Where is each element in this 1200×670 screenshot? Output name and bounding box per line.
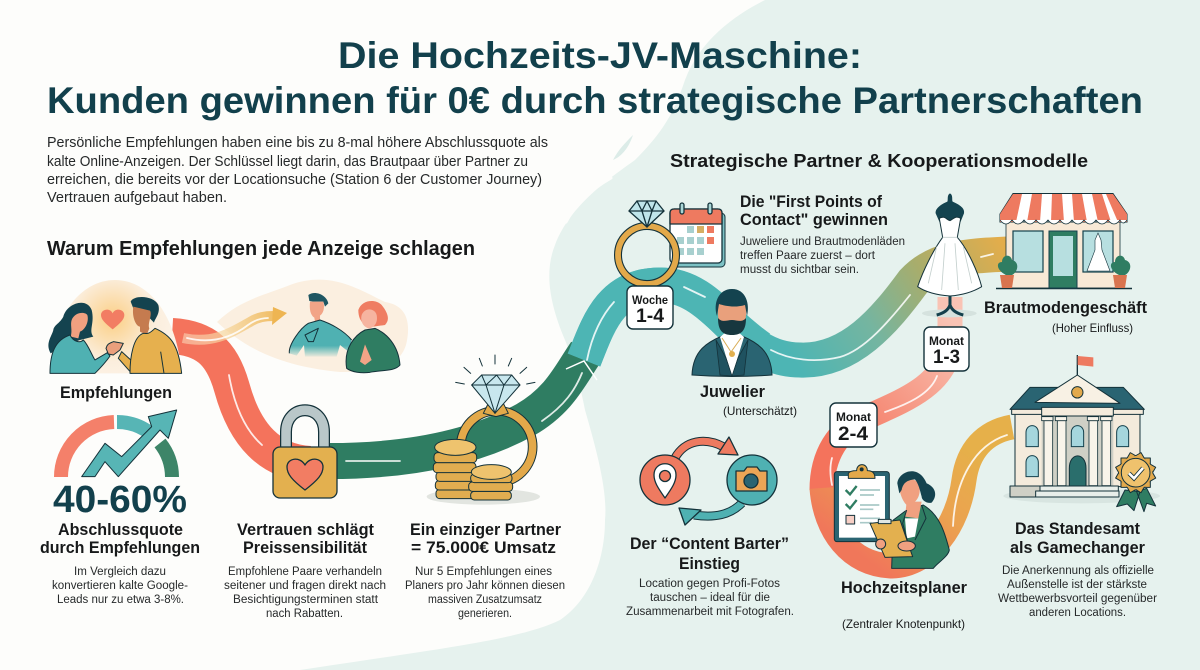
block: First Points of Contact: treffen Paare zuerst – dort bbox=[740, 250, 876, 262]
badge: Woche 1-4 bbox=[627, 286, 673, 329]
block: Standesamt: Die Anerkennung als offizielle bbox=[1002, 565, 1154, 577]
bust bbox=[936, 193, 964, 222]
eaves bbox=[1012, 409, 1143, 414]
left plant bbox=[998, 256, 1017, 275]
block: Ein einziger Partner bbox=[405, 520, 565, 620]
block: Ein einziger Partner: Planers pro Jahr können diesen bbox=[405, 580, 565, 592]
intro text: Persönliche Empfehlungen haben eine bis zu 8-mal höhere Abschlussquote als bbox=[47, 135, 548, 151]
block: Standesamt: anderen Locations. bbox=[1029, 607, 1126, 619]
label: Juwelier bbox=[700, 382, 797, 418]
woman body bbox=[346, 328, 400, 373]
head bbox=[900, 479, 920, 505]
door bbox=[1069, 456, 1086, 486]
title bbox=[47, 35, 1143, 121]
gauge arc: teal bbox=[117, 422, 150, 433]
woman face bbox=[71, 313, 88, 338]
checklist bbox=[846, 486, 857, 508]
badge: Monat 2-4: 2-4 bbox=[838, 424, 868, 445]
ring bbox=[461, 411, 533, 483]
intro text bbox=[47, 135, 548, 206]
block: Ein einziger Partner: massiven Zusatzumsatz bbox=[428, 594, 542, 606]
rising arrow bbox=[82, 410, 177, 477]
badge: Monat 1-3: 1-3 bbox=[933, 347, 960, 368]
block: Content Barter: Location gegen Profi-Fotos bbox=[639, 578, 780, 590]
shadow bbox=[922, 309, 977, 317]
background: white streak bbox=[566, 178, 611, 222]
lock body bbox=[273, 447, 337, 498]
intro text: erreichen, die bereits vor der Locationsuche (Station 6 der Customer Journey) bbox=[47, 172, 542, 188]
woman face bbox=[361, 309, 377, 328]
block: Abschlussquote: konvertieren kalte Google- bbox=[52, 580, 188, 592]
block: Ein einziger Partner: generieren. bbox=[458, 608, 512, 620]
heart bbox=[101, 310, 124, 329]
man torso bbox=[130, 328, 182, 373]
icon: wedding planner bbox=[834, 465, 949, 568]
head bbox=[718, 300, 746, 333]
road segment: coral to planner bbox=[822, 297, 950, 490]
block: First Points of Contact bbox=[740, 192, 905, 276]
diamond bbox=[472, 375, 520, 413]
man arm bbox=[118, 352, 133, 373]
icon: padlock with heart bbox=[273, 410, 337, 498]
clipboard bbox=[834, 472, 889, 542]
block: Abschlussquote bbox=[40, 520, 200, 606]
icon: peer recommendation with arrow bbox=[183, 280, 408, 373]
shackle bbox=[286, 410, 324, 450]
badge: Monat 2-4: Monat bbox=[836, 410, 871, 424]
block: Standesamt: Das Standesamt bbox=[1015, 519, 1140, 538]
base line bbox=[996, 288, 1132, 290]
man face bbox=[310, 302, 324, 322]
heading: strategische Partner: Strategische Partner & Kooperationsmodelle bbox=[670, 151, 1088, 171]
block: Ein einziger Partner: Nur 5 Empfehlungen eines bbox=[415, 566, 552, 578]
man hair bbox=[131, 297, 159, 323]
road segment: teal bbox=[584, 254, 1008, 360]
badge: Monat 2-4 bbox=[830, 403, 877, 447]
block: Vertrauen: Preissensibilität bbox=[243, 538, 367, 557]
teal arrow bbox=[694, 503, 742, 516]
building bbox=[1006, 218, 1120, 288]
road segment: green bbox=[320, 352, 586, 461]
block: Ein einziger Partner: = 75.000€ Umsatz bbox=[411, 538, 556, 557]
ribbon bbox=[1117, 488, 1156, 512]
ground shadow bbox=[1003, 489, 1160, 503]
icon: jeweler bbox=[692, 289, 772, 376]
label: Juwelier: (Unterschätzt) bbox=[723, 404, 797, 418]
block: Vertrauen: Empfohlene Paare verhandeln bbox=[228, 566, 382, 578]
gold arrow bbox=[183, 316, 274, 340]
icon: bridal shop bbox=[996, 194, 1132, 288]
held clipboard bbox=[870, 520, 913, 557]
woman torso bbox=[50, 335, 110, 373]
entablature bbox=[1042, 407, 1113, 416]
windows bbox=[1026, 426, 1129, 477]
roof bbox=[1010, 387, 1144, 409]
road: left coral, green, teal, gold bbox=[172, 254, 1012, 566]
title: Kunden gewinnen für 0€ durch strategische Partnerschaften bbox=[47, 80, 1143, 121]
label: Brautmodengeschäft: Brautmodengeschäft bbox=[984, 298, 1147, 317]
shadow bbox=[427, 489, 540, 505]
man hair bbox=[308, 293, 328, 307]
label: Brautmodengeschäft bbox=[984, 298, 1147, 335]
coral arrow bbox=[675, 441, 724, 458]
seal bbox=[1116, 453, 1156, 493]
icon: calendar bbox=[670, 203, 725, 267]
gauge arc: coral bbox=[61, 422, 114, 477]
label: Hochzeitsplaner: (Zentraler Knotenpunkt) bbox=[842, 617, 965, 631]
man body bbox=[289, 320, 352, 357]
man face bbox=[133, 307, 151, 335]
block: Content Barter: Zusammenarbeit mit Fotografen. bbox=[626, 606, 794, 618]
background: mint streak bbox=[613, 135, 633, 160]
coins left bbox=[433, 439, 477, 499]
block: Vertrauen: Vertrauen schlägt bbox=[237, 520, 374, 539]
block: Abschlussquote: durch Empfehlungen bbox=[40, 538, 200, 557]
heading: warum Empfehlungen: Warum Empfehlungen jede Anzeige schlagen bbox=[47, 238, 475, 260]
block: Ein einziger Partner: Ein einziger Partner bbox=[410, 520, 561, 539]
body bbox=[692, 336, 772, 376]
body bbox=[892, 505, 949, 568]
block: Standesamt: als Gamechanger bbox=[1010, 538, 1145, 557]
peach blob bbox=[217, 280, 408, 372]
woman hands bbox=[360, 344, 372, 365]
block: First Points of Contact: Contact" gewinnen bbox=[740, 210, 888, 229]
coins right bbox=[469, 465, 513, 500]
icon: couple with heart bbox=[48, 280, 182, 373]
badge: Woche 1-4: Woche bbox=[632, 293, 668, 307]
left window bbox=[1013, 231, 1043, 272]
block: Abschlussquote: Im Vergleich dazu bbox=[74, 566, 166, 578]
block: Standesamt bbox=[998, 519, 1157, 619]
lapels bbox=[903, 505, 926, 540]
rays bbox=[456, 355, 535, 384]
road segment: coral bbox=[172, 336, 310, 464]
badge: Monat 1-3: Monat bbox=[929, 334, 964, 348]
columns bbox=[1042, 417, 1112, 486]
icon: diamond ring with coins bbox=[427, 355, 540, 505]
flag bbox=[1075, 355, 1079, 376]
people bbox=[289, 293, 400, 373]
intro text: Vertrauen aufgebaut haben. bbox=[47, 190, 227, 206]
block: Vertrauen: Besichtigungsterminen statt bbox=[233, 594, 379, 606]
hair bbox=[897, 471, 935, 503]
woman hair bbox=[358, 301, 388, 327]
peach arch bbox=[50, 280, 182, 373]
stat: 40-60%: 40-60% bbox=[53, 479, 187, 521]
dress bbox=[918, 217, 982, 296]
road segment: coral to gold bbox=[822, 427, 1012, 566]
label: Brautmodengeschäft: (Hoher Einfluss) bbox=[1052, 321, 1133, 335]
block: Abschlussquote: Leads nur zu etwa 3-8%. bbox=[57, 594, 184, 606]
background: mint region bbox=[300, 0, 1200, 670]
neck bbox=[905, 502, 922, 518]
intro text: kalte Online-Anzeigen. Der Schlüssel liegt darin, das Brautpaar über Partner zu bbox=[47, 154, 528, 170]
badge: Monat 1-3 bbox=[924, 327, 969, 371]
block: First Points of Contact: Die "First Points of bbox=[740, 192, 882, 211]
icon: gold ring with diamond bbox=[618, 201, 676, 284]
hands bbox=[106, 342, 123, 355]
block: First Points of Contact: Juweliere und Brautmodenläden bbox=[740, 236, 905, 248]
right plant bbox=[1111, 256, 1130, 275]
block: Content Barter: Einstieg bbox=[679, 554, 740, 573]
heart bbox=[287, 459, 323, 490]
block: Vertrauen bbox=[224, 520, 386, 620]
label: Hochzeitsplaner: Hochzeitsplaner bbox=[841, 578, 967, 597]
woman hair bbox=[48, 303, 93, 353]
shirt bbox=[905, 518, 918, 538]
icon: wedding dress bbox=[918, 193, 982, 317]
location circle bbox=[640, 455, 690, 505]
block: Vertrauen: nach Rabatten. bbox=[266, 608, 343, 620]
block: Content Barter bbox=[626, 534, 794, 618]
block: Content Barter: Der “Content Barter” bbox=[630, 534, 789, 553]
block: First Points of Contact: musst du sichtbar sein. bbox=[740, 264, 859, 276]
pediment bbox=[1035, 375, 1120, 403]
walls bbox=[1015, 413, 1140, 487]
block: Abschlussquote: Abschlussquote bbox=[58, 520, 183, 539]
awning bbox=[1000, 194, 1127, 222]
block: Content Barter: tauschen – ideal für die bbox=[650, 592, 770, 604]
camera circle bbox=[727, 455, 777, 505]
badge: Woche 1-4: 1-4 bbox=[636, 306, 664, 327]
hands bbox=[876, 539, 886, 549]
block: Standesamt: Wettbewerbsvorteil gegenüber bbox=[998, 593, 1157, 605]
icon: registry office building bbox=[1003, 355, 1160, 512]
title: Die Hochzeits-JV-Maschine: bbox=[338, 35, 862, 76]
stand bbox=[937, 295, 963, 315]
right window with dress bbox=[1083, 231, 1113, 272]
block: Standesamt: Außenstelle ist der stärkste bbox=[1007, 579, 1147, 591]
gauge with rising arrow bbox=[61, 410, 177, 477]
label: Empfehlungen: Empfehlungen bbox=[60, 384, 172, 402]
block: Vertrauen: seitener und fragen direkt nach bbox=[224, 580, 386, 592]
steps bbox=[1010, 486, 1040, 497]
label: Juwelier: Juwelier bbox=[700, 382, 765, 401]
icon: content barter cycle bbox=[640, 437, 777, 525]
label: Hochzeitsplaner bbox=[841, 578, 967, 631]
gauge arc: green bbox=[160, 443, 172, 477]
door bbox=[1049, 231, 1077, 288]
